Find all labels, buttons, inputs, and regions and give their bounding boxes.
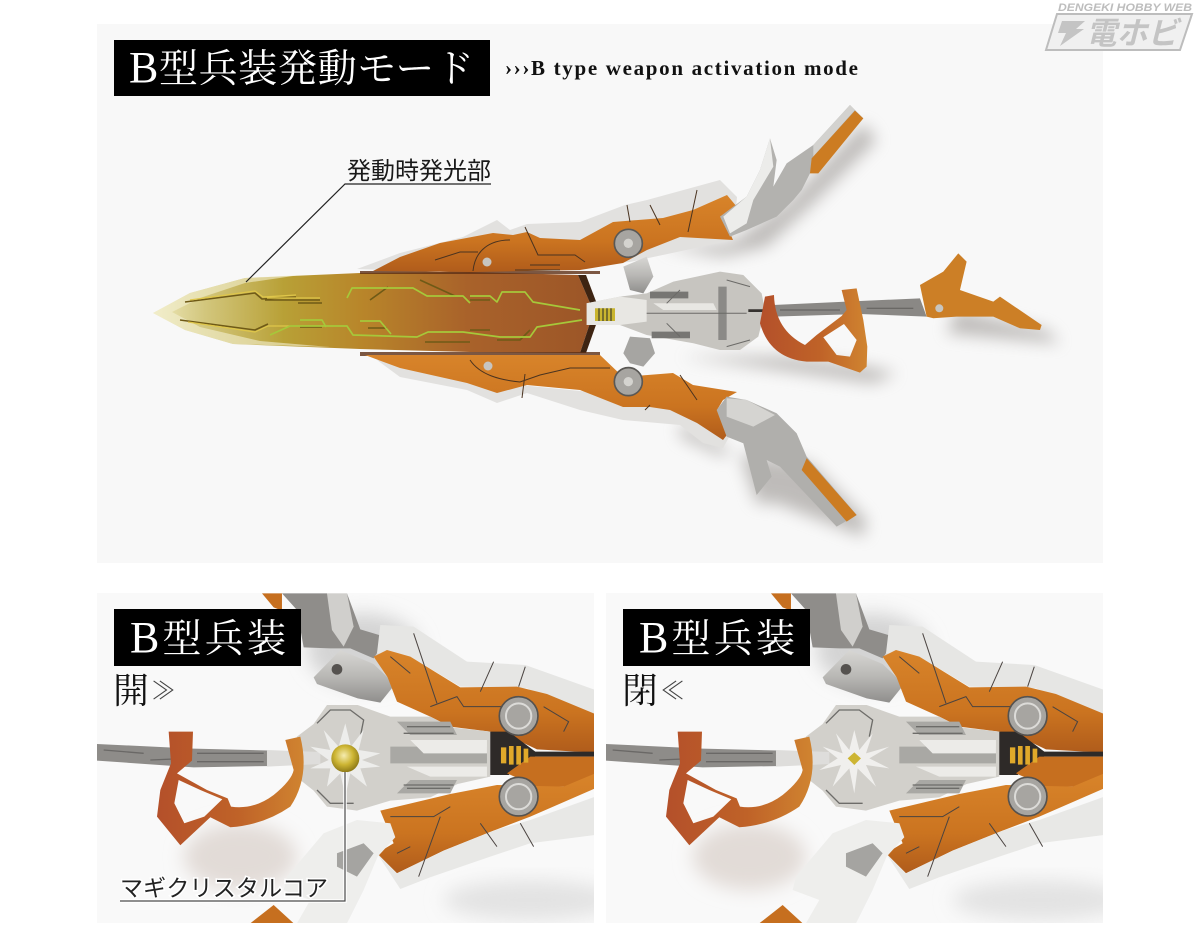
logo: Dengeki Hobby Web: 電ホビ — [1086, 16, 1182, 51]
label: open: ≫ — [151, 678, 176, 705]
panel: B type weapon open — [97, 593, 617, 923]
label: closed: ≪ — [660, 678, 685, 705]
callout: magic crystal core — [120, 772, 345, 901]
heading: B type weapon: B型兵装 — [130, 613, 286, 662]
upper wing — [357, 180, 737, 272]
blade circuit lines — [180, 280, 582, 342]
English subheading: ›››B type weapon activation mode — [505, 56, 858, 80]
callout: glowing part on activation — [246, 158, 491, 282]
heading: B type weapon activation mode: B型兵装発動モード — [129, 43, 474, 92]
heading: B type weapon: B型兵装 — [639, 613, 795, 662]
callout: magic crystal core: マギクリスタルコア — [120, 875, 328, 901]
logo: Dengeki Hobby Web: DENGEKI HOBBY WEB — [1058, 2, 1192, 14]
label: open: 開 — [113, 671, 149, 711]
panel: B type weapon activation mode photo — [97, 24, 1103, 563]
lower claw — [717, 397, 857, 527]
photo: weapon, top view — [153, 105, 1060, 537]
panel: B type weapon closed — [606, 593, 1126, 923]
icon: magic crystal core open — [310, 723, 380, 797]
logo: Dengeki Hobby Web — [1046, 2, 1192, 51]
blade — [153, 272, 590, 353]
central body — [587, 229, 1042, 396]
icon: magic crystal core closed — [819, 730, 889, 793]
label: closed: 閉 — [622, 671, 658, 711]
lower wing — [360, 355, 737, 448]
photo: closed state — [606, 593, 1126, 923]
callout: glowing part on activation: 発動時発光部 — [347, 158, 491, 185]
upper claw — [720, 105, 863, 237]
photo: open state — [97, 593, 617, 923]
